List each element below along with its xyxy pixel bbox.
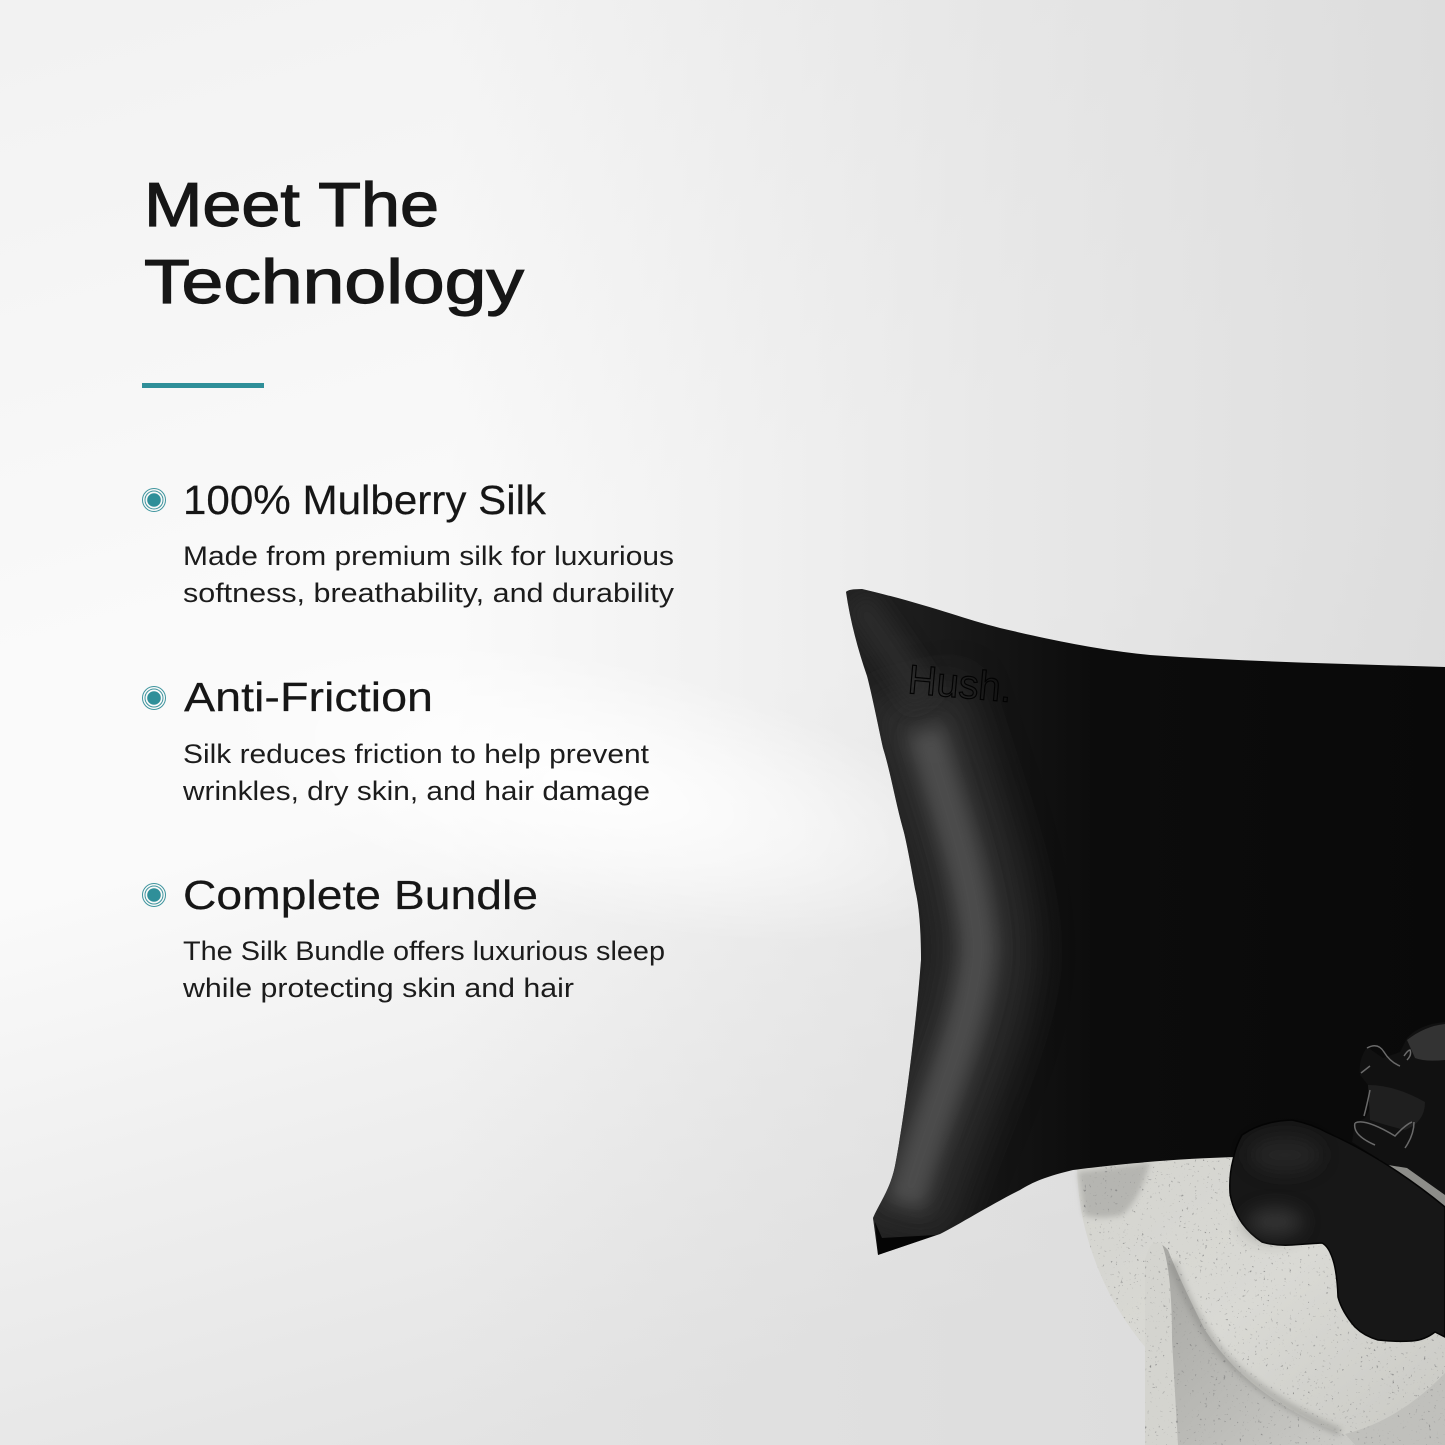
embroidered logo: Hush. — [906, 656, 1014, 711]
title — [144, 171, 524, 317]
teal divider rule — [142, 383, 264, 388]
feature description: Made from premium silk for luxurious — [183, 541, 674, 571]
feature description: Silk reduces friction to help prevent — [183, 739, 650, 769]
feature description: The Silk Bundle offers luxurious sleep — [183, 936, 665, 966]
silk sheen highlights — [856, 600, 982, 1255]
feature description: while protecting skin and hair — [182, 973, 574, 1003]
silk scrunchie — [1352, 1022, 1445, 1215]
icon: teal target bullet — [142, 884, 166, 906]
feature heading: Anti-Friction — [184, 674, 433, 720]
feature description: softness, breathability, and durability — [183, 578, 675, 608]
feature: 100% Mulberry Silk — [142, 477, 675, 608]
title: Technology — [144, 248, 524, 317]
feature: Anti-Friction — [142, 674, 650, 806]
feature heading: Complete Bundle — [183, 872, 538, 918]
feature description — [183, 541, 675, 608]
feature description — [182, 739, 650, 806]
feature: Complete Bundle — [142, 872, 665, 1003]
silk eye mask — [1230, 1120, 1445, 1341]
feature heading: 100% Mulberry Silk — [183, 477, 547, 523]
black silk pillow — [846, 589, 1445, 1255]
icon: teal target bullet — [142, 488, 166, 512]
icon: teal target bullet — [142, 686, 166, 710]
feature description — [182, 936, 665, 1003]
feature description: wrinkles, dry skin, and hair damage — [182, 776, 650, 806]
title: Meet The — [144, 171, 439, 240]
concrete stool — [1077, 1150, 1445, 1445]
